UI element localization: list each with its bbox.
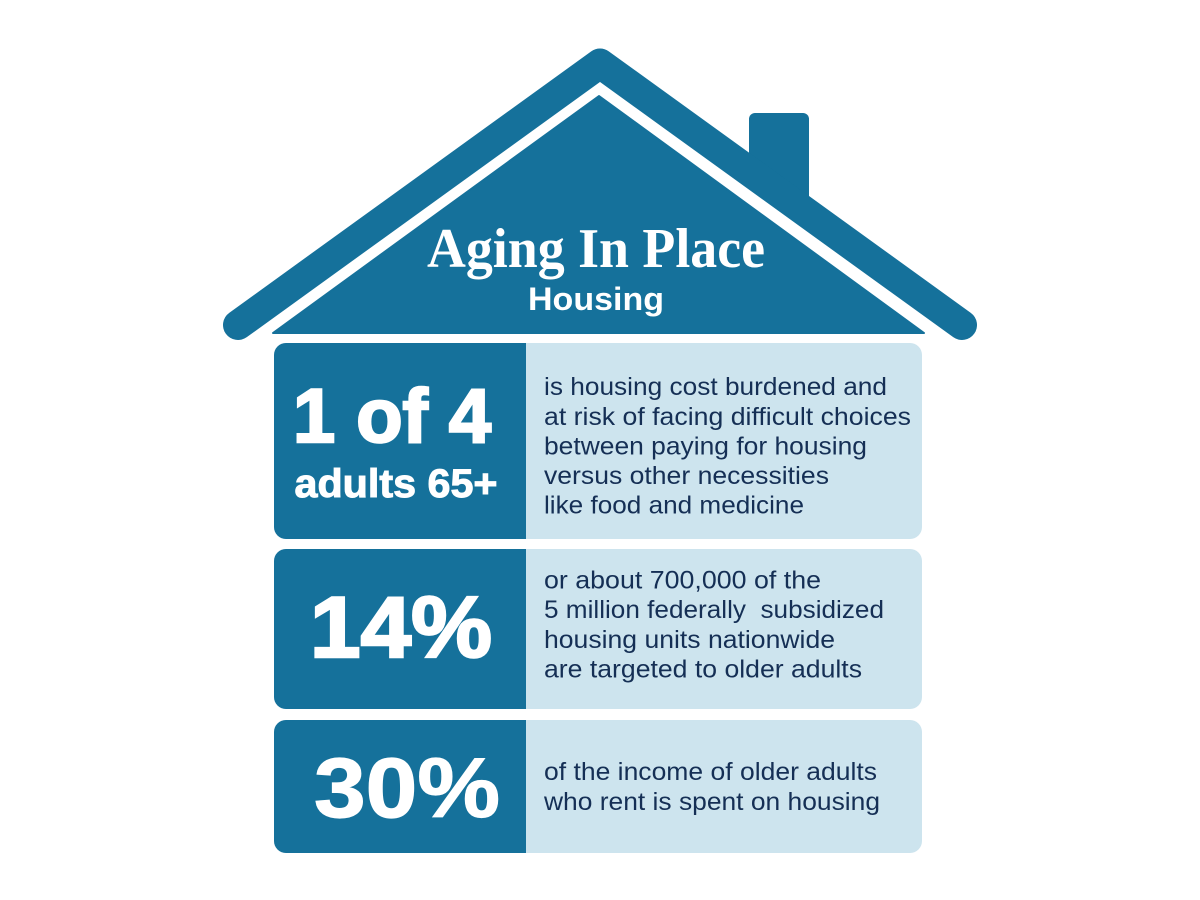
panel background [274,343,922,539]
panel: 14% [274,549,922,709]
description: housing units nationwide [544,626,835,654]
panel background [274,549,922,709]
description [544,566,884,684]
description: is housing cost burdened and [544,373,887,401]
description: like food and medicine [544,492,804,520]
roof outline [238,64,962,325]
description: or about 700,000 of the [544,566,821,594]
stat: 30%: 30% [314,741,500,835]
description: are targeted to older adults [544,656,862,684]
roof gable [273,96,924,333]
panel: 30% [274,720,922,853]
description: versus other necessities [544,462,829,490]
description: at risk of facing difficult choices [544,403,911,431]
description: who rent is spent on housing [543,788,880,816]
panel: 1 of 4 [274,343,922,539]
stat block [274,343,526,539]
stat block [274,549,526,709]
description [544,373,911,520]
stat: 1 of 4: 1 of 4 [293,374,491,459]
stat block [274,720,526,853]
icon: house roof [238,64,962,333]
description: of the income of older adults [544,758,877,786]
panel background [274,720,922,853]
stat: 14%: 14% [310,580,492,676]
description: between paying for housing [544,432,867,460]
stat label: adults 65+ [294,462,498,506]
title: Aging In Place [427,218,765,280]
subtitle: Housing [528,281,664,317]
chimney [749,113,809,215]
description [543,758,880,816]
description: 5 million federally subsidized [544,596,884,624]
